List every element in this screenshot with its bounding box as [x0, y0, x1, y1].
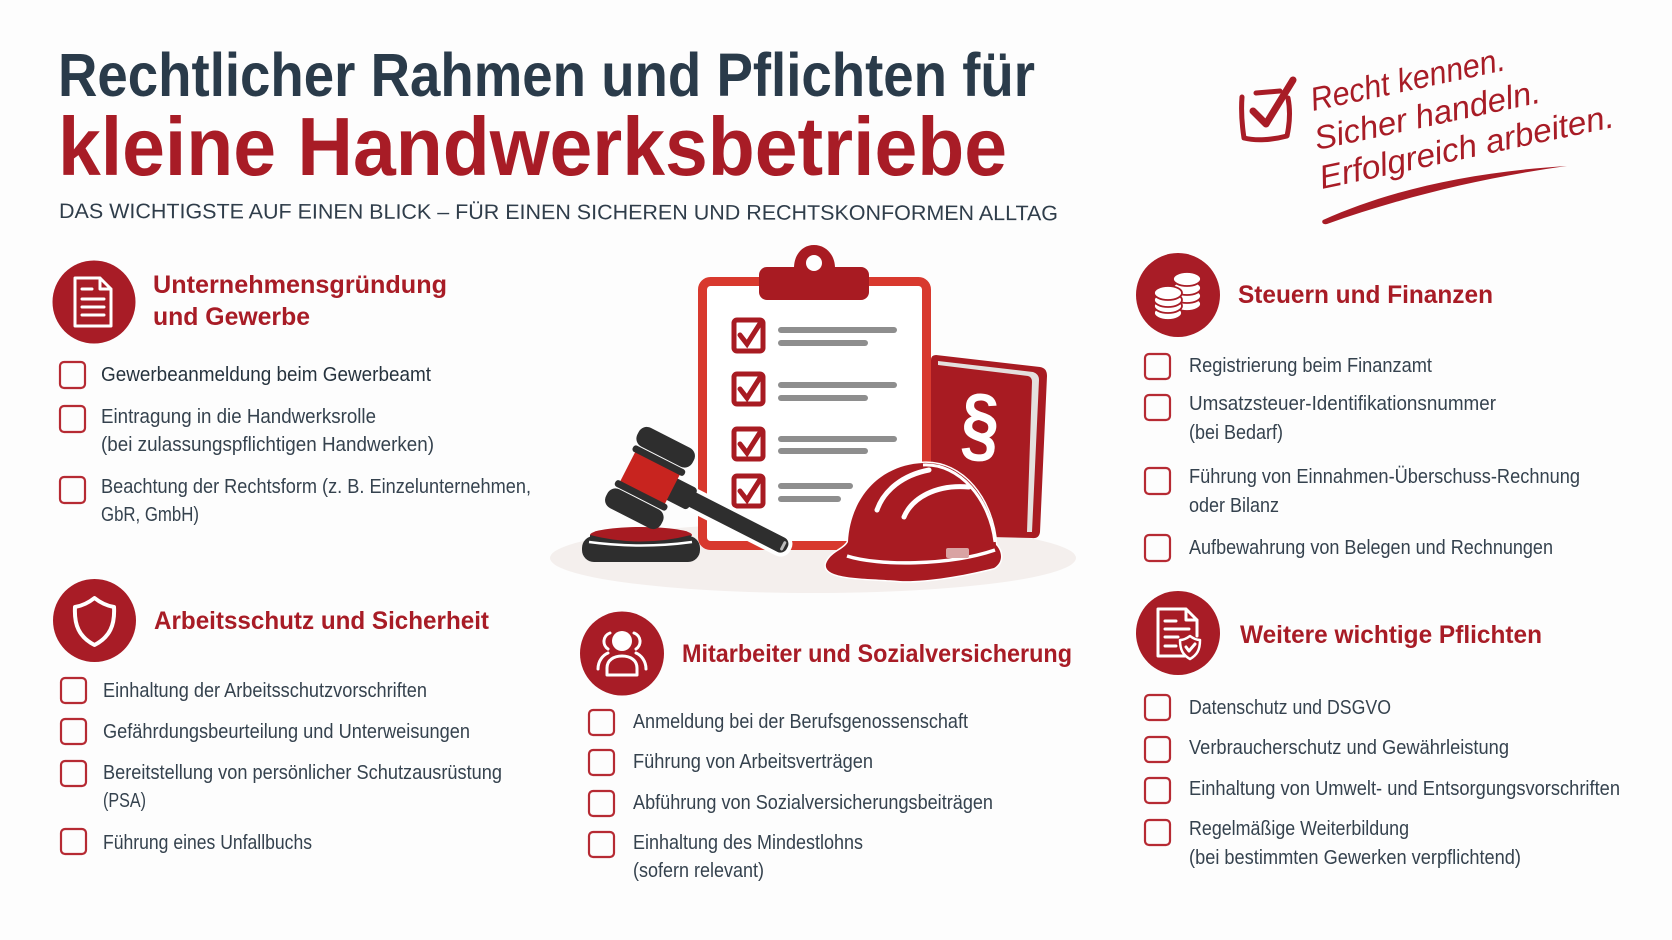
checklist items: [60, 362, 531, 526]
heading: und Gewerbe: [153, 303, 310, 331]
checklist row 2: [734, 374, 897, 404]
slogan text: Erfolgreich arbeiten.: [1316, 97, 1617, 196]
title: kleine Handwerksbetriebe: [58, 100, 1007, 193]
checklist items: Einhaltung des Mindestlohns: [633, 831, 863, 854]
checklist row 3: [734, 429, 897, 459]
checklist items: (PSA): [103, 789, 146, 812]
law book: [930, 355, 1047, 538]
heading: Unternehmensgründung: [153, 271, 447, 299]
checklist items: oder Bilanz: [1189, 494, 1279, 517]
callout: slogan: [1242, 40, 1617, 224]
slogan text: Recht kennen.: [1307, 40, 1508, 118]
heading: Weitere wichtige Pflichten: [1240, 621, 1542, 649]
slogan text: [1307, 40, 1617, 196]
checklist items: Anmeldung bei der Berufsgenossenschaft: [633, 710, 968, 733]
hard hat: [826, 463, 1001, 581]
checklist items: (bei Bedarf): [1189, 421, 1283, 444]
title: [58, 41, 1035, 193]
checklist items: Datenschutz und DSGVO: [1189, 696, 1391, 719]
icon: people: [580, 612, 664, 696]
illustration: clipboard, gavel, law book, helmet: [550, 245, 1076, 593]
panel: Steuern und Finanzen: [1136, 253, 1580, 561]
subtitle: DAS WICHTIGSTE AUF EINEN BLICK – FÜR EINEN SICHEREN UND RECHTSKONFORMEN ALLTAG: [59, 200, 1058, 225]
checklist items: Einhaltung von Umwelt- und Entsorgungsvorschriften: [1189, 777, 1620, 800]
checklist items: [61, 678, 502, 854]
hand-drawn underline: [1322, 166, 1567, 224]
checklist items: (bei bestimmten Gewerken verpflichtend): [1189, 846, 1521, 869]
gavel: [602, 424, 809, 589]
slogan text: Sicher handeln.: [1311, 73, 1543, 157]
icon: shield: [53, 579, 136, 662]
checklist items: Führung von Einnahmen-Überschuss-Rechnung: [1189, 465, 1580, 488]
heading: [153, 271, 447, 331]
heading: Steuern und Finanzen: [1238, 281, 1493, 309]
checklist items: Registrierung beim Finanzamt: [1189, 354, 1432, 377]
checklist items: Führung eines Unfallbuchs: [103, 831, 312, 854]
panel: Weitere wichtige Pflichten: [1136, 591, 1620, 869]
checklist items: Gewerbeanmeldung beim Gewerbeamt: [101, 363, 431, 386]
checklist items: Abführung von Sozialversicherungsbeiträgen: [633, 791, 993, 814]
icon: document with shield: [1136, 591, 1220, 675]
panel: Mitarbeiter und Sozialversicherung: [580, 612, 1072, 882]
checklist items: Umsatzsteuer-Identifikationsnummer: [1189, 392, 1496, 415]
panel: Arbeitsschutz und Sicherheit: [53, 579, 502, 854]
checklist items: (bei zulassungspflichtigen Handwerken): [101, 433, 434, 456]
icon: coins: [1136, 253, 1220, 337]
checklist items: (sofern relevant): [633, 859, 764, 882]
clip: [794, 245, 835, 268]
checklist items: Verbraucherschutz und Gewährleistung: [1189, 736, 1509, 759]
checklist items: Bereitstellung von persönlicher Schutzausrüstung: [103, 761, 502, 784]
icon: document: [52, 260, 136, 344]
heading: Mitarbeiter und Sozialversicherung: [682, 640, 1072, 668]
checklist items: Einhaltung der Arbeitsschutzvorschriften: [103, 679, 427, 702]
checklist items: Führung von Arbeitsverträgen: [633, 750, 873, 773]
ground ellipse: [550, 523, 1076, 593]
checklist items: Beachtung der Rechtsform (z. B. Einzelunternehmen,: [101, 475, 531, 498]
sounding block: [582, 527, 700, 562]
law book: §: [959, 375, 1002, 471]
heading: Arbeitsschutz und Sicherheit: [154, 607, 490, 635]
checklist row 1: [734, 320, 897, 351]
checklist items: Aufbewahrung von Belegen und Rechnungen: [1189, 536, 1553, 559]
checklist items: [589, 710, 993, 882]
checklist items: [1145, 354, 1580, 561]
checklist items: Gefährdungsbeurteilung und Unterweisungen: [103, 720, 470, 743]
panel: Unternehmensgründung und Gewerbe: [52, 260, 531, 526]
title: Rechtlicher Rahmen und Pflichten für: [58, 41, 1035, 109]
checklist items: Regelmäßige Weiterbildung: [1189, 817, 1409, 840]
checklist row 4: [734, 476, 853, 506]
checklist items: [1145, 695, 1620, 869]
checklist items: GbR, GmbH): [101, 503, 199, 526]
checklist items: Eintragung in die Handwerksrolle: [101, 405, 376, 428]
icon: hand-drawn checkbox: [1242, 80, 1293, 140]
clipboard: [702, 245, 926, 546]
